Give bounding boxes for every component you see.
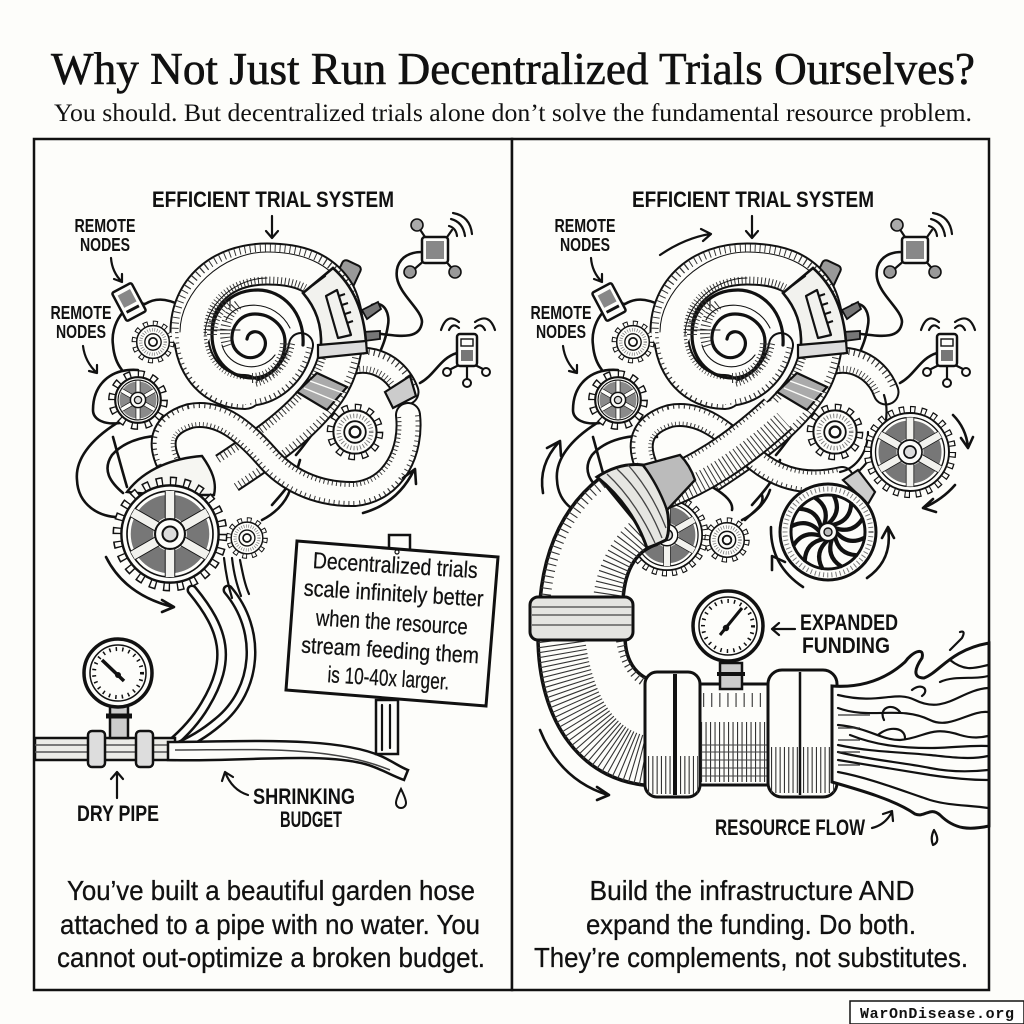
heading: efficient trial system: [632, 187, 874, 238]
callout sign: Decentralized trials: [312, 547, 478, 583]
callout sign: is 10-40x larger.: [327, 661, 450, 695]
label: remote nodes lower: NODES: [56, 322, 106, 342]
inner spiral coil: [212, 290, 303, 378]
subtitle: You should. But decentralized trials alone don’t solve the fundamental resource problem.: [54, 98, 972, 127]
label: remote nodes upper: NODES: [560, 235, 610, 255]
caption: left: [57, 875, 485, 973]
caption: right: They’re complements, not substitutes.: [534, 942, 968, 973]
arm tube to clamp: [350, 360, 406, 392]
callout sign: scale infinitely better: [303, 575, 485, 612]
label: dry pipe: DRY PIPE: [77, 801, 159, 826]
feed hoses to dry pipe: [170, 558, 251, 748]
water splashes: [932, 632, 964, 845]
gear behind elbow: [629, 497, 705, 573]
gear: large main: [118, 482, 222, 586]
label: remote nodes lower: NODES: [536, 322, 586, 342]
clamp on loop: [385, 376, 416, 408]
curved arrow beside loop: [363, 469, 416, 513]
caption: left: cannot out-optimize a broken budget.: [57, 942, 485, 973]
heading: efficient trial system: EFFICIENT TRIAL SYSTEM: [152, 187, 394, 212]
gear: small lower: [229, 520, 265, 556]
caption: right: [534, 875, 968, 973]
label: remote nodes upper: [554, 216, 616, 282]
watermark badge: WarOnDisease.org: [860, 1006, 1014, 1023]
rotation arrows around right gear: [923, 415, 973, 512]
label: shrinking budget: [222, 772, 355, 832]
dry pipe: [35, 731, 175, 767]
connector ports on spiral: [362, 302, 381, 341]
infinity loop tube: [164, 415, 409, 494]
gauge: expanded funding: [693, 591, 763, 689]
arrow below elbow: [540, 730, 609, 800]
label: dry pipe: [77, 772, 159, 826]
label: remote nodes lower: [50, 303, 112, 373]
callout sign: stream feeding them: [301, 632, 480, 668]
gear: medium left: [112, 374, 164, 426]
watermark badge: [850, 1001, 1024, 1024]
device: remote node top right: [404, 213, 472, 278]
label: expanded funding: FUNDING: [802, 633, 890, 658]
sign post: [376, 535, 410, 754]
machine: spiral tubes, small gears and nodes: [77, 213, 495, 520]
rotation arrow around big gear: [106, 557, 174, 612]
gauge: dry pipe: [84, 639, 152, 738]
big spiral tube: [180, 252, 345, 473]
callout sign: [286, 541, 498, 706]
label: remote nodes lower: [530, 303, 592, 373]
caption: left: You’ve built a beautiful garden hose: [67, 875, 475, 906]
shrinking budget hose: [168, 741, 408, 780]
clamp on spiral: [303, 268, 367, 358]
gear: small lower: [708, 521, 746, 559]
gear: medium right: [331, 408, 379, 456]
label: remote nodes lower: REMOTE: [50, 303, 112, 323]
label: shrinking budget: SHRINKING: [253, 784, 355, 809]
arrow left of machine: [542, 441, 561, 493]
device: remote node left: [112, 283, 146, 321]
label: remote nodes upper: NODES: [80, 235, 130, 255]
device: remote node right: [441, 318, 495, 387]
top-right nozzle: [334, 259, 362, 289]
wires: [77, 252, 457, 520]
water drip: [396, 789, 406, 808]
machine: spiral tubes, small gears and nodes (repeat): [557, 213, 975, 520]
pipe flanges: [530, 455, 837, 797]
panel: left, dry pipe: [34, 139, 512, 990]
right infinity loop tube: [642, 395, 887, 481]
sleeve on main tube: [297, 373, 347, 410]
small wires under loop: [676, 470, 763, 520]
label: expanded funding: [772, 610, 898, 658]
label: remote nodes upper: REMOTE: [554, 216, 616, 236]
gear: right large: [868, 410, 952, 494]
horizontal pipe section: [690, 684, 780, 785]
label: shrinking budget: BUDGET: [280, 807, 342, 832]
caption: left: attached to a pipe with no water. You: [60, 909, 480, 940]
tube sleeve above big gear: [127, 456, 215, 495]
water jet: [832, 643, 989, 828]
label: remote nodes lower: REMOTE: [530, 303, 592, 323]
panel: right, funded pipe: [512, 139, 989, 990]
label: expanded funding: EXPANDED: [800, 610, 898, 635]
main tube into elbow sleeve: [660, 408, 778, 490]
title: Why Not Just Run Decentralized Trials Ourselves?: [51, 44, 975, 94]
big elbow pipe: [538, 478, 660, 786]
turbine: [780, 484, 876, 580]
arrow over spiral: [660, 229, 711, 255]
gear: small upper left: [135, 324, 171, 360]
label: resource flow: RESOURCE FLOW: [715, 815, 865, 840]
label: remote nodes upper: [74, 216, 136, 282]
caption: right: Build the infrastructure AND: [590, 875, 914, 906]
caption: right: expand the funding. Do both.: [586, 909, 916, 940]
callout sign: when the resource: [314, 604, 469, 640]
clamp below right gear: [843, 470, 875, 504]
heading: efficient trial system: EFFICIENT TRIAL SYSTEM: [632, 187, 874, 212]
turbine arrows: [771, 527, 894, 587]
label: remote nodes upper: REMOTE: [74, 216, 136, 236]
heading: efficient trial system: [152, 187, 394, 238]
